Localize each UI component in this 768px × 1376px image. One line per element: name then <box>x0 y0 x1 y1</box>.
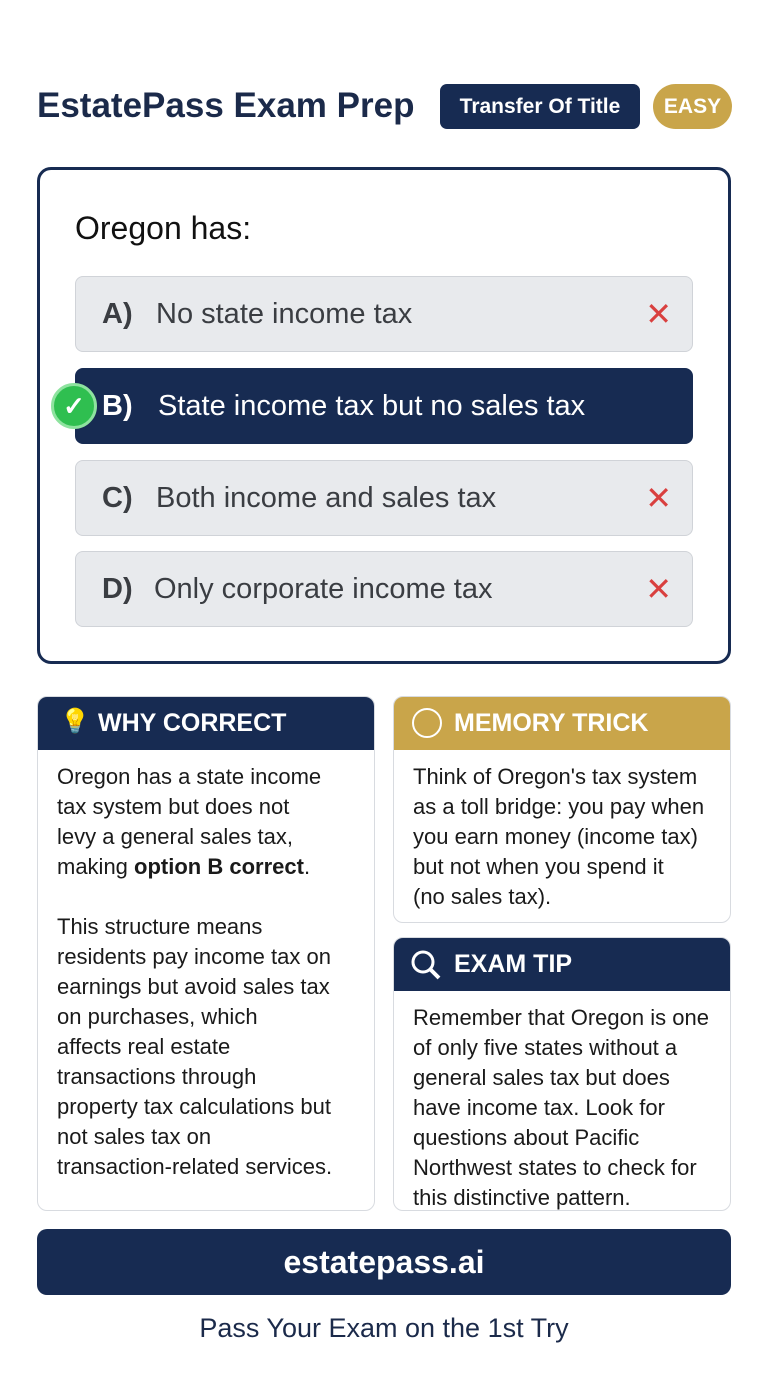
option D <box>75 551 693 627</box>
panel: exam tip <box>393 937 731 1211</box>
option D: ✕ <box>645 571 672 607</box>
icon: check: ✓ <box>63 391 85 421</box>
text: memory trick: you earn money (income tax) <box>413 824 698 849</box>
text: explanation: This structure means <box>57 914 262 939</box>
text: explanation: not sales tax on <box>57 1124 211 1149</box>
option A: No state income tax <box>156 298 412 330</box>
tagline: Pass Your Exam on the 1st Try <box>199 1313 569 1343</box>
text: exam tip: have income tax. Look for <box>413 1095 665 1120</box>
text: memory trick: Think of Oregon's tax system <box>413 764 697 789</box>
option B (correct): B) <box>102 390 133 422</box>
option C: Both income and sales tax <box>156 482 496 514</box>
option B (correct) <box>75 368 693 444</box>
text: exam tip: questions about Pacific <box>413 1125 639 1150</box>
badge: topic <box>440 84 640 129</box>
text: explanation: tax system but does not <box>57 794 289 819</box>
text: explanation: Oregon has a state income <box>57 764 321 789</box>
text: exam tip: of only five states without a <box>413 1035 677 1060</box>
text: explanation: on purchases, which <box>57 1004 258 1029</box>
heading: exam tip <box>394 938 730 991</box>
text: exam tip: this distinctive pattern. <box>413 1185 631 1210</box>
text: explanation: property tax calculations but <box>57 1094 331 1119</box>
text: explanation: levy a general sales tax, <box>57 824 293 849</box>
heading: memory trick <box>394 697 730 750</box>
badge: difficulty <box>653 84 732 129</box>
heading: memory trick: MEMORY TRICK <box>454 709 648 737</box>
icon: check <box>51 383 97 429</box>
option C: C) <box>102 482 133 514</box>
text: exam tip: Remember that Oregon is one <box>413 1005 709 1030</box>
text: explanation: residents pay income tax on <box>57 944 331 969</box>
option B (correct): State income tax but no sales tax <box>158 390 585 422</box>
heading: why correct: 💡 <box>60 708 90 735</box>
text: explanation: earnings but avoid sales tax <box>57 974 330 999</box>
text: memory trick: as a toll bridge: you pay when <box>413 794 704 819</box>
option A <box>75 276 693 352</box>
heading: exam tip: EXAM TIP <box>454 950 572 978</box>
text: memory trick: (no sales tax). <box>413 884 551 909</box>
text: explanation: transaction-related services. <box>57 1154 332 1179</box>
text: exam tip: Northwest states to check for <box>413 1155 697 1180</box>
text: memory trick <box>413 764 704 909</box>
text: exam tip: general sales tax but does <box>413 1065 670 1090</box>
badge: difficulty: EASY <box>664 95 721 118</box>
text: explanation: making option B correct. <box>57 854 310 879</box>
text: exam tip <box>413 1005 709 1210</box>
badge: topic: Transfer Of Title <box>460 95 620 118</box>
text: memory trick: but not when you spend it <box>413 854 664 879</box>
question card <box>37 167 731 664</box>
footer bar: estatepass.ai <box>283 1244 484 1280</box>
option A: ✕ <box>645 296 672 332</box>
heading: why correct: WHY CORRECT <box>98 709 286 737</box>
option D: D) <box>102 572 133 604</box>
option C <box>75 460 693 536</box>
text: explanation <box>57 764 332 1179</box>
option C: ✕ <box>645 480 672 516</box>
footer bar <box>37 1229 731 1295</box>
title: EstatePass Exam Prep <box>37 86 414 125</box>
panel: memory trick <box>393 696 731 923</box>
heading: why correct <box>38 697 374 750</box>
option A: A) <box>102 298 133 330</box>
option D: Only corporate income tax <box>154 572 492 604</box>
text: explanation: transactions through <box>57 1064 256 1089</box>
text: explanation: affects real estate <box>57 1034 230 1059</box>
question text: Oregon has: <box>75 210 251 246</box>
panel: why correct <box>37 696 375 1211</box>
